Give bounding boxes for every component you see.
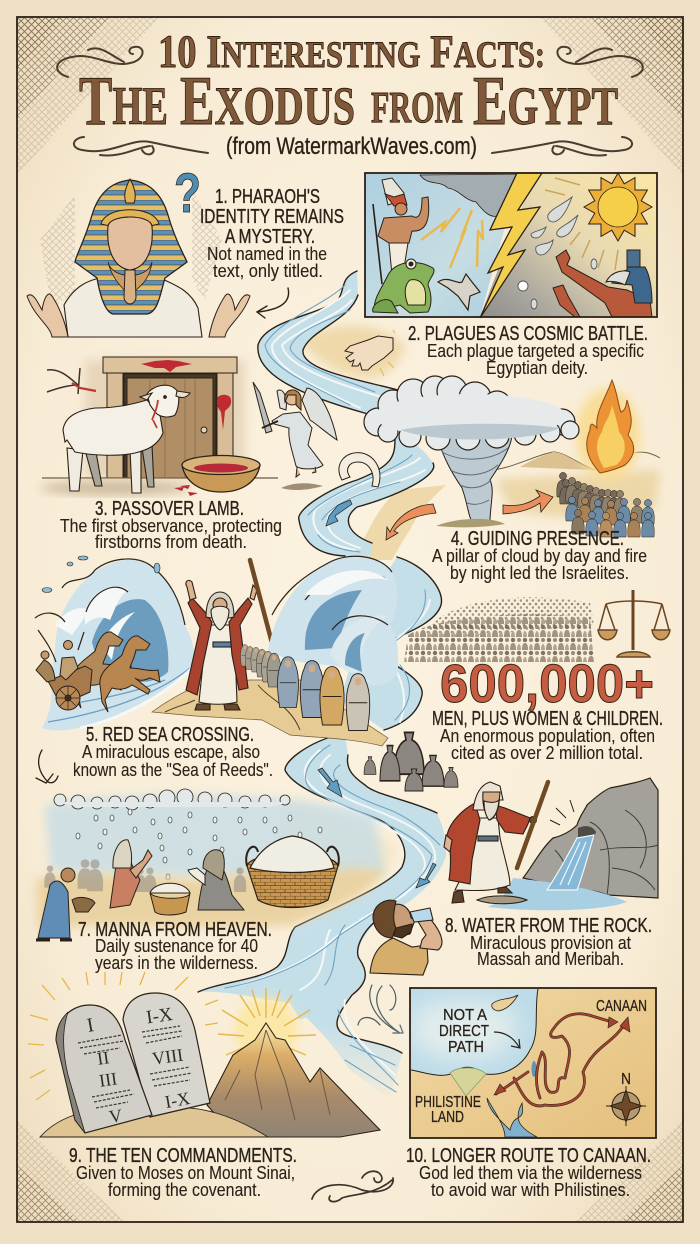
tablet numerals: I [85,1014,96,1037]
subtitle: (from WatermarkWaves.com) [226,133,477,160]
map labels: N [621,1071,631,1088]
dead sea [532,1061,536,1077]
map labels: CANAAN [596,998,647,1015]
sun rays [545,178,618,270]
title: THE [79,63,168,140]
text: fact 5: A miraculous escape, also [82,742,260,762]
panel: fact 9 ten commandments [28,972,380,1137]
spark lines [550,800,574,825]
title: EGYPT [473,63,618,140]
not a direct path arrow [494,1032,520,1048]
icon: weights [364,732,458,791]
pool [488,878,627,910]
moses [186,580,257,710]
river: current streaks [240,290,435,1075]
frog [373,259,434,313]
blood marks [141,360,231,430]
pillar of cloud [364,376,579,450]
text: fact 4: by night led the Israelites. [450,563,629,583]
text: fact 9: 9. THE TEN COMMANDMENTS. [69,1145,297,1167]
route [496,1014,626,1106]
panel: fact 3 passover lamb [40,357,337,496]
clouds [54,789,290,810]
panel: fact 10 map [410,988,656,1138]
blank face [108,217,152,270]
destroying angel [253,382,337,477]
text: fact 2: Egyptian deity. [486,358,588,378]
text: fact 9: Given to Moses on Mount Sinai, [76,1163,295,1183]
red sea [487,1098,537,1137]
mountain rays [218,988,316,1055]
dead animal [438,274,480,310]
sky wash [45,795,385,878]
text: fact 9: forming the covenant. [108,1180,261,1200]
gatherer with blue robe [36,868,95,940]
right wave wall [268,556,398,686]
panel: fact 2 plagues [365,173,657,318]
crown band [101,210,159,226]
text: fact 5: 5. RED SEA CROSSING. [86,724,254,746]
text: fact 7: years in the wilderness. [95,953,258,973]
israelites column [557,472,654,537]
small lightning [421,208,483,268]
text: fact 8 [445,915,652,969]
text: fact 5: known as the "Sea of Reeds". [73,760,273,780]
curved arrow [257,288,289,318]
text: fact 8: Massah and Meribah. [477,949,624,969]
text: fact 3 [60,498,282,552]
title flourishes [57,47,643,156]
panel: fact 4 guiding presence [339,376,660,540]
beard [124,270,136,304]
text: fact 1: 1. PHARAOH'S [215,186,320,208]
sheep [63,385,190,493]
title: FROM [371,83,463,132]
big basket [246,836,339,908]
tablet numerals: III [98,1068,118,1091]
map labels [415,998,647,1126]
text: fact 7: Daily sustenance for 40 [95,936,258,956]
wave curl [339,453,380,487]
left tablet [56,1005,152,1133]
text: fact 7: 7. MANNA FROM HEAVEN. [78,919,272,941]
falling manna [76,809,322,880]
fire glow [576,389,640,481]
river [198,271,446,1100]
map labels: PATH [448,1039,484,1056]
kneeling woman [188,850,244,910]
floor line [42,477,278,479]
distant people [44,859,246,892]
tablet numerals: I-X [145,1004,174,1028]
desert hills [495,470,660,518]
title: EXODUS [180,63,355,140]
tablet numerals: I-X [163,1088,191,1112]
right tablet [123,993,210,1117]
drinking man [370,900,442,975]
icon: open hand [345,330,395,376]
herbs [47,368,96,394]
text: fact 6 [432,708,663,763]
river: banks [198,271,442,1053]
grass at tornado base [436,519,505,527]
orange arrows [386,490,553,540]
map labels: LAND [431,1109,464,1126]
text: fact 10: God led them via the wilderness [419,1163,642,1183]
compass [606,1086,646,1126]
panel: fact 1 Pharaoh [27,161,289,337]
panel: fact 8 water from rock [370,778,658,975]
sand washes around river [270,326,446,925]
river: water body [198,271,446,1100]
swirl arrows to map [358,985,403,1033]
moses 2 [444,782,536,904]
storm cloud [420,174,520,216]
text: fact 4 [432,528,647,583]
sun [584,173,652,241]
text: fact 7 [78,919,272,973]
text: fact 1 [200,186,344,281]
sun glow around mountain [234,998,298,1062]
text: fact 1: A MYSTERY. [225,226,315,248]
bowl [182,456,260,492]
woman in red robe [110,840,152,908]
hook arrow [36,750,58,783]
tablet numerals [85,1004,191,1127]
map labels: PHILISTINE [415,1094,481,1111]
mediterranean [411,989,538,1075]
waterfall [547,835,594,890]
text: fact 2: Each plague targeted a specific [427,341,644,361]
tablet numerals: V [108,1105,123,1127]
tablet numerals: VIII [151,1045,184,1069]
big lightning [480,173,542,318]
text: fact 5 [73,724,273,780]
text: fact 6: cited as over 2 million total. [451,743,643,763]
chariot and horses [36,630,160,712]
text: fact 10 [406,1145,651,1200]
panel: fact 6 population [404,590,670,714]
doorway [103,357,237,478]
hands [27,294,68,337]
nemes headdress [75,180,187,314]
text: fact 1: IDENTITY REMAINS [200,206,344,228]
rock [523,778,658,898]
map labels: NOT A [443,1007,487,1024]
hatching behind head [40,190,222,310]
israelites crossing [241,644,370,730]
tornado [437,436,512,522]
text: fact 3: 3. PASSOVER LAMB. [95,498,244,520]
cyprus [492,995,518,1011]
panel: fact 7 manna [36,789,385,940]
mound [40,1107,268,1137]
tablet rays [28,972,218,1100]
text: fact 9 [69,1145,297,1200]
crowd [420,597,594,640]
text: fact 4: 4. GUIDING PRESENCE. [451,528,624,550]
text: fact 10: to avoid war with Philistines. [431,1180,630,1200]
route arrowheads [494,1017,630,1095]
title [79,26,618,140]
robe [64,278,202,337]
text: fact 1: text, only titled. [213,261,323,281]
text: fact 4: A pillar of cloud by day and fire [432,546,647,566]
hail [518,197,597,309]
scales [598,590,670,657]
question mark: ? [174,161,201,224]
uraeus [125,179,135,203]
parted land [152,680,388,746]
egyptian god left [373,178,429,284]
text: fact 6: An enormous population, often [440,726,655,746]
fire [587,380,634,473]
text: fact 8: Miraculous provision at [470,933,631,953]
small basket [150,883,190,915]
title: 10 INTERESTING FACTS: [158,26,545,78]
left wave wall [42,560,195,730]
panel: fact 5 red sea crossing [35,556,398,746]
map labels: DIRECT [439,1023,489,1040]
text: fact 3: The first observance, protecting [60,516,282,536]
tablet numerals: II [96,1047,110,1069]
river arrows [318,500,436,888]
text: fact 1: Not named in the [207,244,327,264]
decorative swirl [312,1171,393,1202]
big number: 600,000+ [440,654,654,714]
falcon god right [553,250,652,317]
text: fact 3: firstborns from death. [95,532,247,552]
text: fact 2 [408,323,648,378]
desert ground [36,869,385,930]
cloud puffs [364,376,579,450]
neck [108,262,152,290]
tablet writing [78,1026,192,1108]
mountain [207,1023,380,1137]
nile delta [450,1068,486,1096]
